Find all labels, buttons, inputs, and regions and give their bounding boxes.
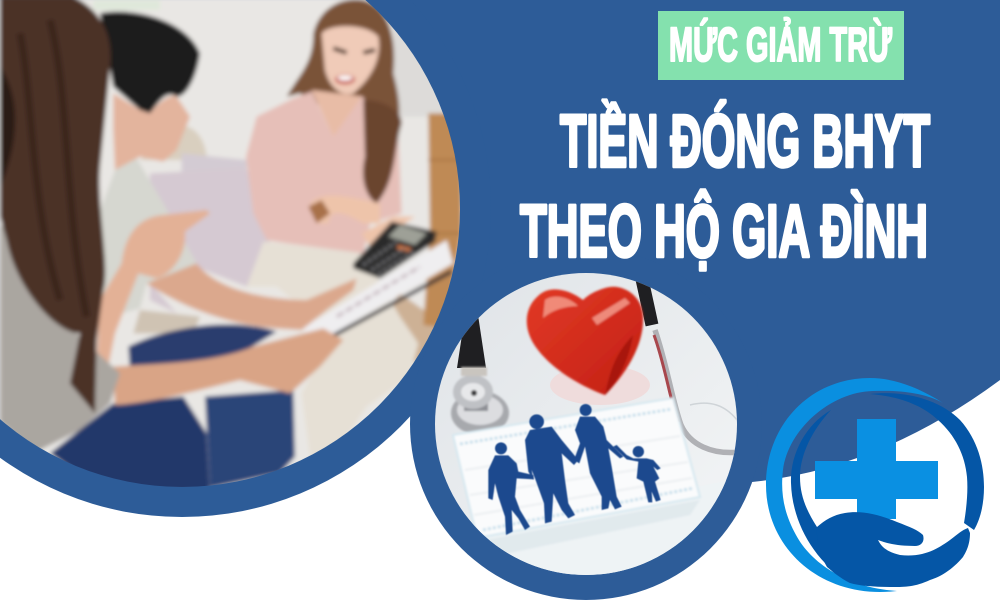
medical mask (453, 398, 700, 555)
girl (613, 445, 661, 502)
boy (488, 442, 534, 535)
icon: red heart (527, 287, 643, 395)
medical cross (815, 419, 938, 519)
icon: medical logo with cross and caring hand (766, 378, 984, 592)
dark blue ring right (870, 393, 984, 530)
icon: stethoscope chest piece (451, 367, 509, 435)
dark blue ring left (791, 410, 860, 583)
caring hand (817, 512, 970, 587)
father (525, 414, 578, 523)
photo: family consulting with calculator (0, 0, 460, 487)
icon: stethoscope tube right (640, 270, 740, 453)
paper family silhouette (488, 404, 661, 535)
light blue crescent (766, 378, 943, 592)
title (520, 100, 930, 272)
badge: mức giảm trừ (658, 11, 904, 80)
icon: stethoscope tube left (457, 315, 486, 368)
mother (574, 404, 623, 510)
photo: heart, stethoscope and paper family on a mask (430, 270, 740, 580)
